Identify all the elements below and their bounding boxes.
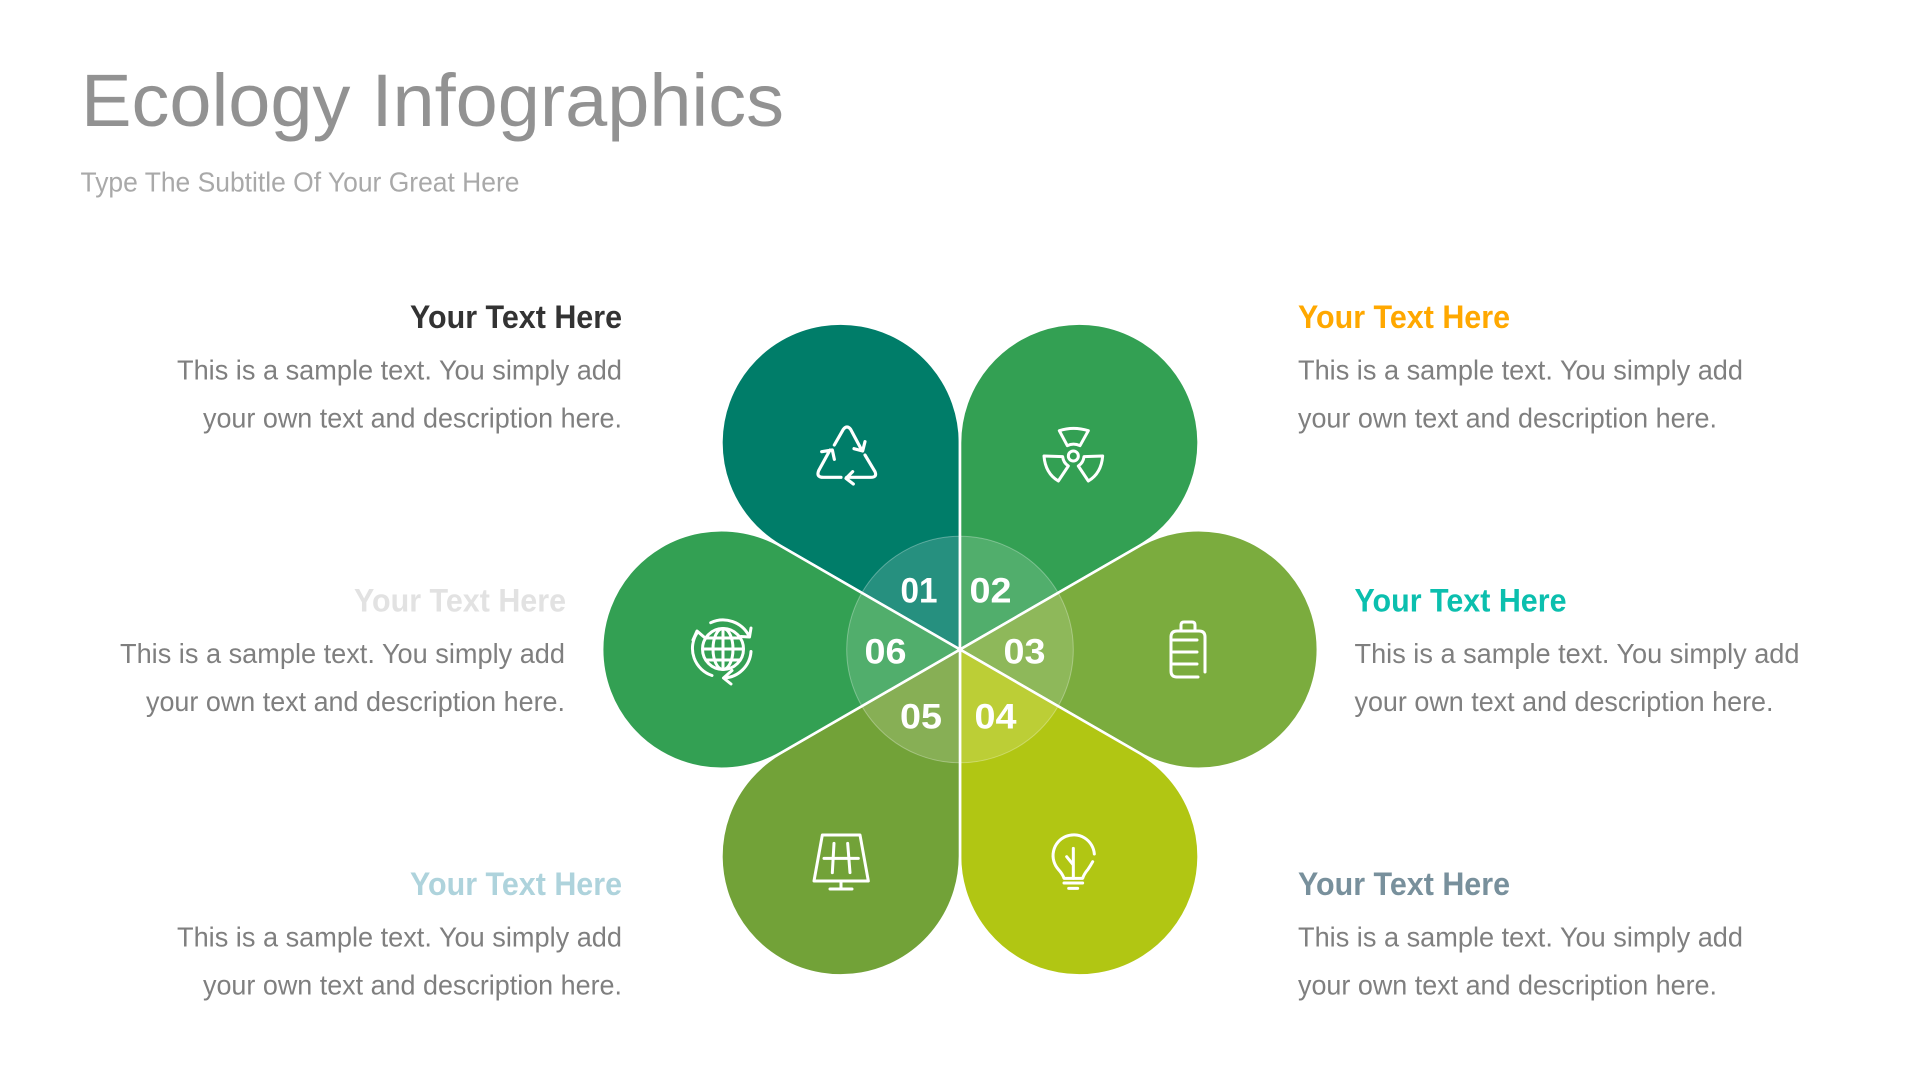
petal 02 [960, 324, 1199, 650]
text block 01: This is a sample text. You simply add [177, 354, 622, 386]
text block 06: your own text and description here. [146, 686, 565, 717]
text block 01: your own text and description here. [203, 402, 622, 434]
text block 03 [1354, 582, 1800, 717]
text block 02: Your Text Here [1298, 299, 1510, 335]
text block 04: your own text and description here. [1298, 970, 1717, 1000]
text block 02: your own text and description here. [1298, 402, 1717, 434]
text block 01 [177, 299, 622, 434]
subtitle: Type The Subtitle Of Your Great Here [80, 166, 520, 198]
text block 02: This is a sample text. You simply add [1298, 354, 1743, 386]
text block 01: Your Text Here [410, 299, 622, 335]
text block 04 [1298, 866, 1743, 1000]
text block 06 [120, 582, 566, 717]
text block 04: This is a sample text. You simply add [1298, 922, 1743, 952]
text block 06: This is a sample text. You simply add [120, 638, 565, 669]
text block 02 [1298, 299, 1743, 434]
icon: solar panel [814, 835, 868, 889]
number 03: 03 [1004, 632, 1046, 672]
number 02: 02 [970, 572, 1012, 610]
number 01: 01 [900, 572, 938, 610]
text block 03: This is a sample text. You simply add [1354, 638, 1800, 669]
icon: radiation [1044, 428, 1103, 481]
icon: light bulb [1053, 835, 1094, 888]
number 06: 06 [864, 632, 906, 672]
text block 06: Your Text Here [354, 582, 566, 618]
title: Ecology Infographics [81, 59, 784, 142]
icon: recycle [818, 427, 876, 484]
text block 05: Your Text Here [410, 866, 622, 902]
number 04: 04 [974, 698, 1017, 736]
icon: battery [1171, 622, 1205, 677]
petal 04 [960, 650, 1199, 975]
petal 01 [721, 324, 960, 650]
text block 05 [177, 866, 622, 1000]
flower diagram [602, 324, 1318, 975]
text block 05: This is a sample text. You simply add [177, 922, 622, 952]
petal 05 [721, 650, 960, 975]
icon: globe with arrows [692, 620, 751, 684]
petal 03 [960, 530, 1318, 769]
number 05: 05 [900, 698, 942, 736]
centre translucent circle [847, 536, 1073, 763]
text block 04: Your Text Here [1298, 866, 1510, 902]
text block 03: Your Text Here [1354, 582, 1566, 618]
petal 06 [602, 530, 960, 769]
text block 05: your own text and description here. [203, 970, 622, 1000]
text block 03: your own text and description here. [1354, 686, 1774, 717]
